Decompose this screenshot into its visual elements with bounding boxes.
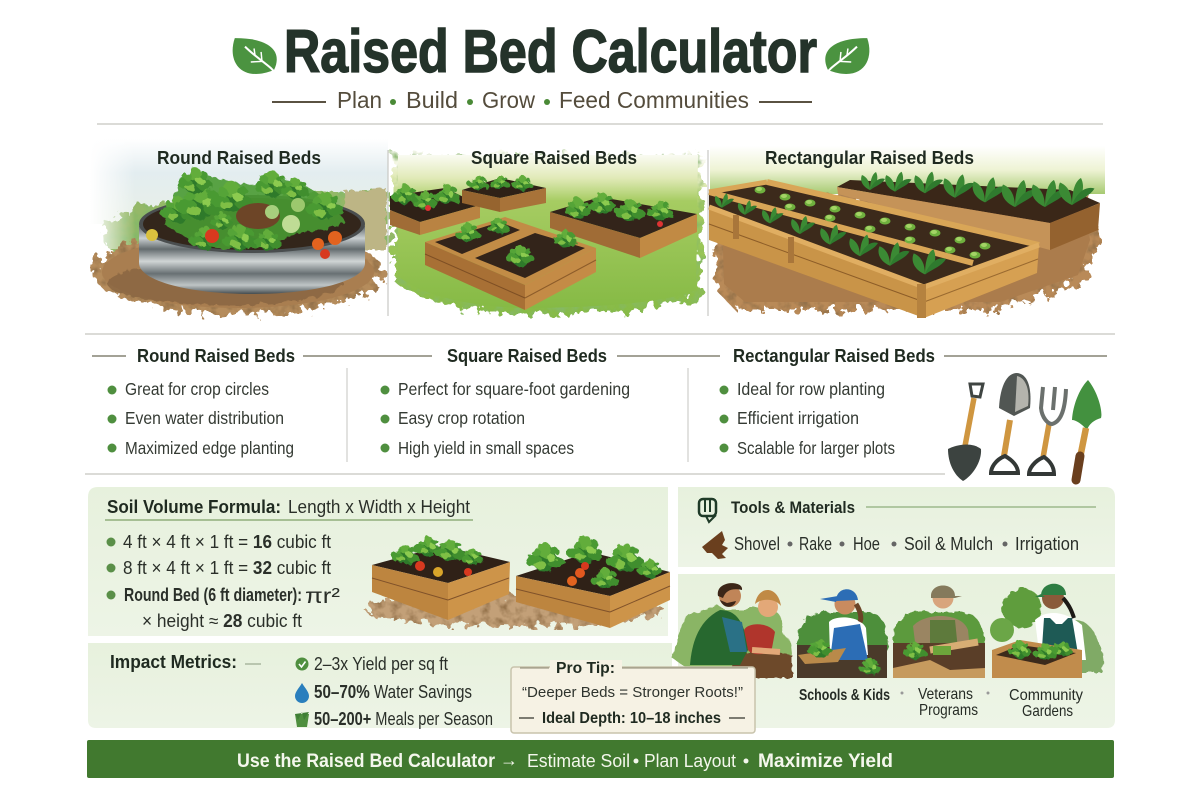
panel: impact metrics: [88, 643, 672, 729]
call to action banner: Plan Layout: [644, 751, 736, 771]
panel: square bed benefits: Easy crop rotation: [398, 408, 525, 428]
fork: [1029, 387, 1066, 474]
panel: rectangular bed benefits: Efficient irrigation: [737, 408, 859, 428]
materials list: Rake: [799, 534, 832, 554]
formula rows: Round Bed (6 ft diameter):: [124, 585, 302, 605]
panel: round raised bed illustration: [90, 139, 388, 314]
formula rows: πr²: [305, 585, 340, 608]
panel: round bed benefits: Even water distribution: [125, 408, 284, 428]
panel: square bed benefits: Square Raised Beds: [447, 345, 607, 366]
panel: round bed benefits: Maximized edge planting: [125, 438, 294, 458]
callout: pro tip: [511, 660, 755, 733]
illustration: schools and kids: [797, 589, 887, 678]
right bed: [550, 192, 697, 258]
illustration: adult and child: [674, 583, 792, 678]
metric: yield: 2–3x Yield per sq ft: [314, 654, 448, 674]
call to action banner: Maximize Yield: [758, 751, 893, 772]
sprouts row: [715, 193, 946, 274]
seedlings row: [754, 186, 990, 258]
heading: Round image: Round Raised Beds: [157, 147, 321, 168]
materials list: Soil & Mulch: [904, 534, 993, 554]
heading: Square image: Square Raised Beds: [471, 147, 637, 168]
metric: water: 50–70% Water Savings: [314, 682, 472, 702]
front bed: [709, 182, 1039, 318]
callout: pro tip: Pro Tip:: [556, 660, 615, 677]
formula rows: 4 ft × 4 ft × 1 ft = 16 cubic ft: [123, 532, 331, 552]
call to action banner: [87, 740, 1114, 778]
trowel: [1072, 380, 1101, 480]
formula rows: × height ≈ 28 cubic ft: [142, 611, 302, 631]
spade: [991, 373, 1030, 473]
panel: rectangular bed benefits: Scalable for larger plots: [737, 438, 895, 458]
icon: brown tool: [702, 531, 728, 559]
subtitle: Feed Communities: [559, 87, 749, 113]
panel: impact metrics: Impact Metrics:: [110, 652, 237, 672]
panel: tools and materials: Tools & Materials: [731, 499, 855, 517]
call to action banner: →: [500, 750, 518, 770]
image separators: [387, 150, 389, 316]
bed one: [372, 536, 510, 620]
icon: right leaf: [818, 37, 872, 78]
panel: square raised beds illustration: [390, 155, 703, 314]
heading: Raised Bed Calculator: Raised Bed Calculator: [284, 18, 817, 85]
call to action banner: Estimate Soil: [527, 751, 630, 771]
plants and tomatoes: [146, 168, 345, 259]
subtitle: [272, 87, 812, 113]
label: Schools & Kids: Schools & Kids: [799, 687, 890, 704]
back bed: [837, 172, 1100, 250]
callout: pro tip: “Deeper Beds = Stronger Roots!”: [522, 684, 743, 701]
panel: square bed benefits: Perfect for square-foot gardening: [398, 379, 630, 399]
back-left bed: [390, 184, 480, 235]
subtitle: Plan: [337, 87, 382, 113]
materials list: [734, 534, 1079, 554]
callout: pro tip: Ideal Depth: 10–18 inches: [542, 710, 721, 727]
panel: rectangular bed benefits: Ideal for row planting: [737, 379, 885, 399]
call to action banner: Use the Raised Bed Calculator: [237, 751, 496, 772]
formula rows: [106, 532, 340, 631]
illustration: community gardens: [990, 584, 1103, 678]
materials list: Irrigation: [1015, 534, 1079, 554]
bed two: [516, 536, 670, 628]
illustration: two wooden beds: [365, 536, 670, 628]
center divided bed: [425, 217, 596, 310]
metal tank: [139, 226, 365, 294]
panel: round bed benefits: Round Raised Beds: [137, 345, 295, 366]
label: Veterans Programs: Veterans: [918, 686, 973, 703]
formula heading: Soil Volume Formula:: [107, 497, 281, 517]
label: Community Gardens: Gardens: [1022, 703, 1073, 720]
formula rows: 8 ft × 4 ft × 1 ft = 32 cubic ft: [123, 558, 331, 578]
icon: garden tools: [948, 373, 1101, 481]
panel: tools and materials: [678, 487, 1115, 567]
heading: Rectangular image: Rectangular Raised Beds: [765, 147, 974, 168]
materials list: Hoe: [853, 534, 880, 554]
label: Veterans Programs: Programs: [919, 702, 978, 719]
panel: rectangular bed benefits: Rectangular Raised Beds: [733, 345, 935, 366]
subtitle: Grow: [482, 87, 535, 113]
formula heading: [105, 497, 473, 520]
materials list: Shovel: [734, 534, 780, 554]
title: [230, 18, 872, 85]
panel: soil volume formula: [88, 487, 670, 636]
panel: round bed benefits: Great for crop circles: [125, 379, 269, 399]
panel: community programs: [674, 574, 1115, 728]
panel: square bed benefits: [380, 345, 720, 458]
shovel: [948, 384, 983, 481]
icon: left leaf: [230, 37, 284, 78]
icon: tools badge: [699, 499, 716, 522]
subtitle: Build: [406, 87, 458, 113]
illustration: veterans programs: [893, 586, 985, 678]
label: Community Gardens: Community: [1009, 687, 1083, 704]
panel: round bed benefits: [92, 345, 432, 458]
panel: rectangular bed benefits: [720, 345, 1107, 458]
panel: rectangular raised beds illustration: [709, 146, 1105, 318]
panel: square bed benefits: High yield in small spaces: [398, 438, 574, 458]
metric: meals: 50–200+ Meals per Season: [314, 709, 493, 729]
formula heading: Length x Width x Height: [288, 497, 470, 517]
back bed: [462, 175, 546, 212]
